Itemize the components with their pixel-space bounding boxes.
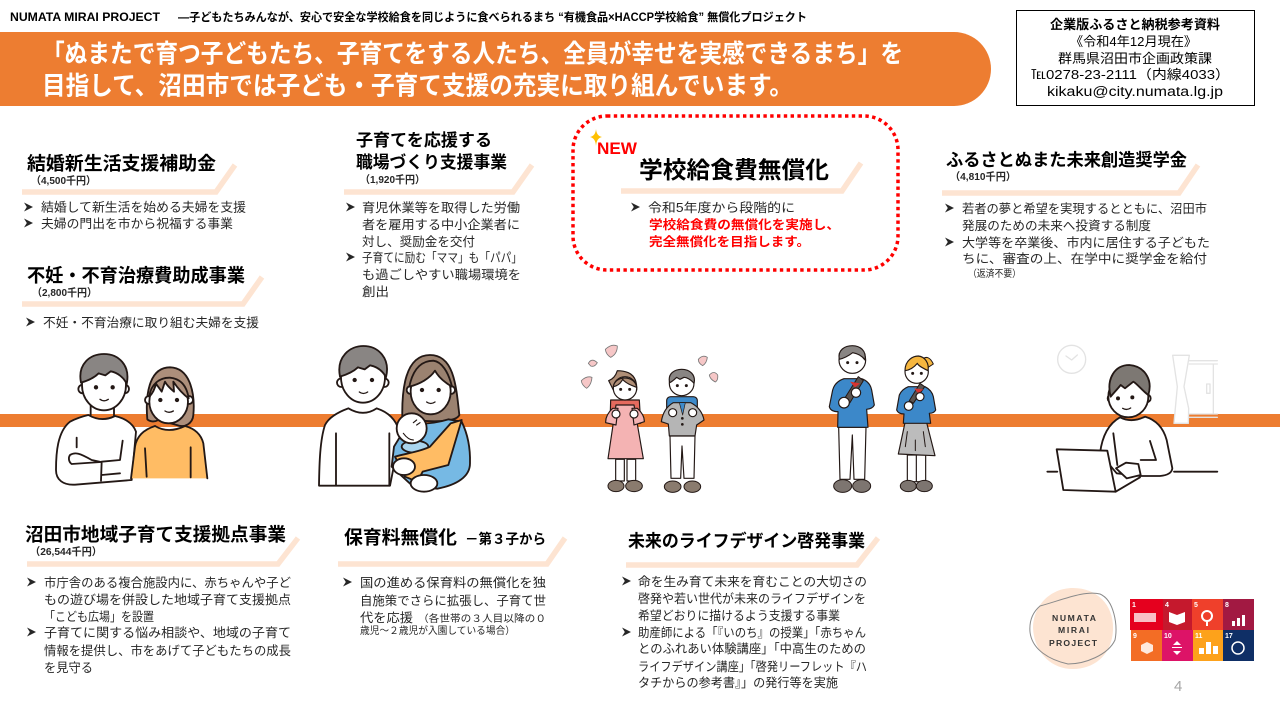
SDGs icon grid [1130,599,1254,661]
panel: scholarship [942,150,1210,280]
bullet: free school lunch: 完全無償化を目指します。 [649,234,810,249]
banner heading: 目指して、沼田市では子ども・子育て支援の充実に取り組んでいます。 [42,72,793,100]
heading: scholarship: ふるさとぬまた未来創造奨学金 [946,150,1187,170]
amount: scholarship: （4,810千円） [950,170,1016,183]
cherry blossom petals [581,345,718,388]
heading: workplace support: 子育てを応援する [356,131,492,150]
girl with pink dress [606,371,644,492]
bullets: childcare hub [27,576,291,675]
bullets: childcare hub: 「こども広場」を設置 [44,610,154,624]
reference info box: kikaku@city.numata.lg.jp [1047,84,1223,99]
bullets: free nursery fees: 歳児～２歳児が入園している場合） [360,624,515,637]
panel: workplace support [344,131,532,299]
bullets: free nursery fees: 自施策でさらに拡張し、子育て世 [360,593,546,608]
bullets: workplace support: 者を雇用する中小企業者に [362,217,520,232]
panel: marriage support [22,153,246,231]
heading: childcare hub: 沼田市地域子育て支援拠点事業 [25,524,286,545]
bullets: workplace support [346,200,522,299]
orange timeline band [0,414,1280,427]
underline: marriage support [22,165,235,192]
bullet: free school lunch: 令和5年度から段階的に [648,200,795,215]
reference info box: ℡0278-23-2111（内線4033） [1031,67,1230,82]
heading: workplace support: 職場づくり支援事業 [356,152,507,172]
amount: workplace support: （1,920千円） [360,173,425,186]
logo: Numata Mirai Project: PROJECT [1049,638,1098,648]
man with crossed arms [56,354,136,485]
bullets: childcare hub: を見守る [44,661,93,675]
SDGs icon grid: 4 [1165,602,1169,609]
heading: life design: 未来のライフデザイン啓発事業 [628,531,865,551]
bullets: childcare hub: 情報を提供し、市をあげて子どもたちの成長 [44,643,291,658]
boy in blue blazer [829,346,874,492]
panel: free nursery fees [338,527,565,637]
bullets: scholarship [945,201,1210,280]
banner heading: 「ぬまたで育つ子どもたち、子育てをする人たち、全員が幸せを実感できるまち」を [42,40,903,68]
bullets: life design: ライフデザイン講座」「啓発リーフレット『ハ [638,659,867,674]
logo: Numata Mirai Project: NUMATA [1052,613,1096,623]
bullets: life design: 啓発や若い世代が未来のライフデザインを [638,591,866,606]
bullet: fertility treatment: 不妊・不育治療に取り組む夫婦を支援 [43,315,259,330]
reference info box: 《令和4年12月現在》 [1070,34,1197,49]
bullets: workplace support: 対し、奨励金を交付 [362,235,475,249]
heading: free school lunch: 学校給食費無償化 [639,157,829,183]
illustration: elementary school children [581,345,718,492]
logo: Numata Mirai Project [1030,588,1116,669]
bullets: marriage support: 結婚して新生活を始める夫婦を支援 [41,200,246,214]
bullets: workplace support: 育児休業等を取得した労働 [362,200,520,215]
bullets: marriage support: 夫婦の門出を市から祝福する事業 [41,216,233,231]
heading: marriage support: 結婚新生活支援補助金 [27,153,216,174]
page number: 4 [1174,678,1182,695]
new label: NEW [597,139,638,158]
panel: free school lunch [573,116,898,270]
bullets: scholarship: 若者の夢と希望を実現するとともに、沼田市 [962,201,1207,216]
logo: Numata Mirai Project: MIRAI [1058,625,1089,635]
bullets: workplace support: 子育てに励む「ママ」も「パパ」 [362,250,522,265]
bullets: life design: 命を生み育て未来を育むことの大切さの [638,574,867,589]
bullets: free nursery fees: （各世帯の３人目以降の０ [418,612,546,625]
project tagline: NUMATA MIRAI PROJECT [10,12,160,24]
heading: free nursery fees: 保育料無償化 [344,527,457,548]
bullets: life design: 希望どおりに描けるよう支援する事業 [638,608,840,623]
banner heading [0,32,991,106]
SDGs icon grid: 1 [1132,602,1136,609]
bullets: workplace support: 創出 [362,285,389,299]
dotted red frame [573,116,898,270]
reference info box: 企業版ふるさと納税参考資料 [1050,17,1220,32]
bullets: life design: タチからの参考書』」の発行等を実施 [638,675,838,690]
illustration: parents with baby [319,346,470,492]
father [319,346,400,486]
reference info box: 群馬県沼田市企画政策課 [1058,51,1212,66]
illustration: person working on laptop [1047,345,1217,492]
bullets: free nursery fees: 代を応援 [360,611,414,625]
amount: childcare hub: （26,544千円） [30,545,102,558]
bullets: marriage support [24,200,246,231]
SDGs icon grid: 5 [1194,602,1198,609]
reference info box [1016,10,1254,106]
underline: free nursery fees [338,538,565,564]
amount: fertility treatment: （2,800千円） [32,286,97,299]
mother with baby [392,355,470,492]
underline: scholarship [942,165,1198,193]
woman with orange top [131,367,207,478]
person [1100,365,1172,476]
girl in blue blazer [897,356,936,492]
bullets: free nursery fees: 国の進める保育料の無償化を独 [360,575,547,590]
bullets: free nursery fees [343,575,547,637]
illustration: graduating students [829,346,936,492]
bullets: scholarship: （返済不要） [968,268,1021,280]
bullets: life design [622,574,867,690]
SDGs icon grid: 10 [1164,633,1172,640]
panel: future life design [622,531,878,690]
laptop and desk [1047,449,1217,492]
bullets: workplace support: も過ごしやすい職場環境を [362,267,521,282]
SDGs icon grid: 11 [1195,633,1203,640]
bullet: free school lunch: 学校給食費の無償化を実施し、 [649,217,840,232]
underline: life design [626,538,878,565]
SDGs icon grid: 9 [1133,633,1137,640]
panel: fertility treatment subsidy [22,265,262,330]
boy with backpack [661,369,704,492]
heading: fertility treatment: 不妊・不育治療費助成事業 [27,265,245,286]
panel: community childcare hub [25,524,298,675]
bullets: scholarship: 大学等を卒業後、市内に居住する子どもた [962,235,1210,250]
bullets: scholarship: 発展のための未来へ投資する制度 [962,218,1151,233]
underline: fertility treatment [22,277,262,304]
SDGs icon grid: 17 [1225,633,1233,640]
bullets: childcare hub: もの遊び場を併設した地域子育て支援拠点 [44,592,291,607]
bullets: life design: 助産師による「『いのち』の授業」「赤ちゃん [638,625,866,640]
bullets: scholarship: ちに、審査の上、在学中に奨学金を給付 [962,251,1207,266]
illustration: couple [56,354,207,485]
underline: childcare hub [27,538,298,564]
underline: workplace support [344,165,532,192]
bullets: life design: とのふれあい体験講座」「中高生のための [638,641,866,656]
project tagline [10,10,807,24]
underline: free school lunch [621,163,861,191]
heading: free nursery fees: －第３子から [465,531,546,547]
room background: clock and curtain [1058,345,1217,423]
bullet: free school lunch [631,200,840,249]
bullets: childcare hub: 市庁舎のある複合施設内に、赤ちゃんや子ど [44,576,291,590]
amount: marriage support: （4,500千円） [31,174,96,187]
bullets: childcare hub: 子育てに関する悩み相談や、地域の子育て [44,625,291,640]
project tagline: ―子どもたちみんなが、安心で安全な学校給食を同じように食べられるまち “有機食品×HACCP学校給食” 無償化プロジェクト [178,10,807,24]
SDGs icon grid: 8 [1225,602,1229,609]
icon: sparkle [590,129,602,146]
